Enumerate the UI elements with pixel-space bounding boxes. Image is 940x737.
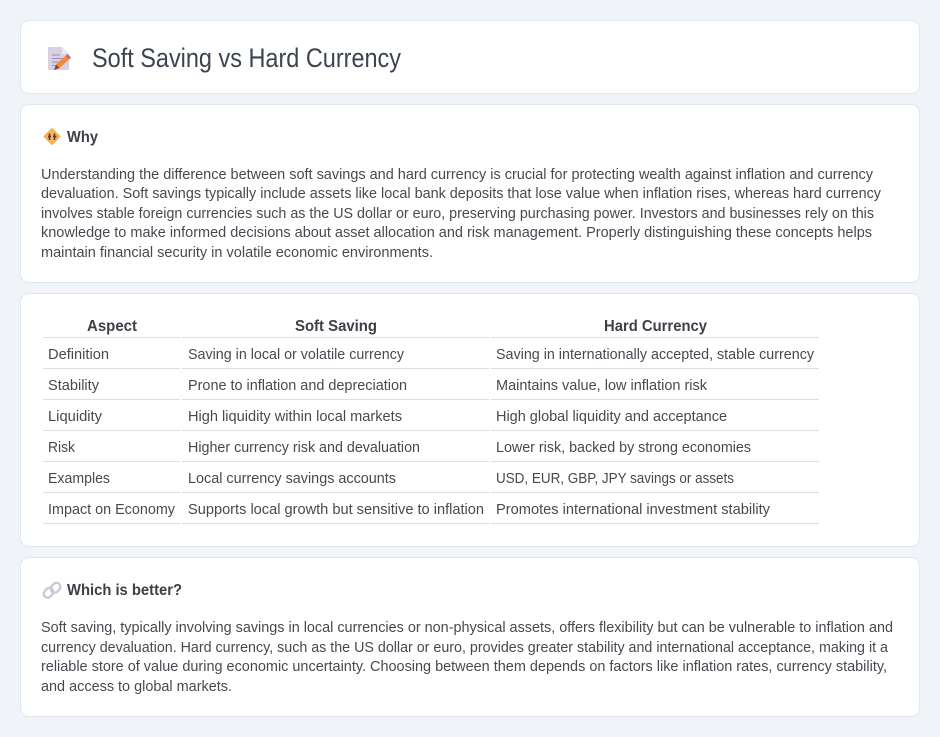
text block: why paragraph: Understanding the difference between soft savings and hard currency is crucial for protecting wealth against inflation and currency xyxy=(41,167,874,183)
table row: risk: Lower risk, backed by strong economies xyxy=(496,440,751,456)
table row: impact on economy: Supports local growth but sensitive to inflation xyxy=(188,502,484,518)
text block: why paragraph: maintain financial security in volatile economic environments. xyxy=(41,245,433,261)
table row: examples: Local currency savings accounts xyxy=(188,471,396,487)
table row: stability xyxy=(48,378,708,394)
table row: stability: Stability xyxy=(48,378,100,394)
table row: examples: USD, EUR, GBP, JPY savings or assets xyxy=(496,471,734,487)
text block: which is better paragraph: Soft saving, typically involving savings in local currencies or non-physical assets, offers flexibility but can be vulnerable to inflation and xyxy=(41,620,893,636)
panel: header xyxy=(20,20,920,94)
table row: impact on economy xyxy=(48,502,771,518)
table row: definition xyxy=(48,347,815,363)
table row: liquidity: High liquidity within local markets xyxy=(188,409,402,425)
table row: examples: Examples xyxy=(48,471,110,487)
table row: risk: Risk xyxy=(48,440,76,456)
panel: comparison table xyxy=(20,294,920,546)
heading: why: Why xyxy=(67,129,98,146)
table row: impact on economy: Promotes international investment stability xyxy=(496,502,771,518)
table row: examples xyxy=(48,471,734,487)
table row: stability: Prone to inflation and depreciation xyxy=(188,378,407,394)
table row: liquidity: Liquidity xyxy=(48,409,103,425)
text block: which is better paragraph xyxy=(41,620,893,695)
text block: why paragraph: knowledge to make informed decisions about asset allocation and risk management. Properly distinguishing these concepts helps xyxy=(41,225,872,241)
icon: link xyxy=(42,581,62,599)
table row: definition: Definition xyxy=(48,347,109,363)
icon: diamond sign xyxy=(44,128,60,144)
panel: why xyxy=(20,104,920,282)
table row: stability: Maintains value, low inflation risk xyxy=(496,378,708,394)
table header row: Aspect xyxy=(87,318,137,335)
table row: liquidity xyxy=(48,409,727,425)
text block: which is better paragraph: reliable store of value during economic uncertainty. Choosing between them depends on factors like inflation rates, currency stability, xyxy=(41,659,887,675)
text block: why paragraph: involves stable foreign currencies such as the US dollar or euro, preserving purchasing power. Investors and businesses rely on this xyxy=(41,206,874,222)
icon: memo document with pencil xyxy=(48,47,71,70)
panel: which is better xyxy=(20,558,920,716)
heading: which is better: Which is better? xyxy=(67,582,182,599)
table row: liquidity: High global liquidity and acceptance xyxy=(496,409,727,425)
table row: risk: Higher currency risk and devaluation xyxy=(188,440,420,456)
table row: impact on economy: Impact on Economy xyxy=(48,502,176,518)
text block: which is better paragraph: currency devaluation. Hard currency, such as the US dollar or euro, provides greater stability and international acceptance, making it a xyxy=(41,640,889,656)
text block: which is better paragraph: and access to global markets. xyxy=(41,679,232,695)
table row: risk xyxy=(48,440,751,456)
table header row xyxy=(87,318,707,335)
table row: definition: Saving in local or volatile currency xyxy=(188,347,405,363)
table row: definition: Saving in internationally accepted, stable currency xyxy=(496,347,815,363)
title: Soft Saving vs Hard Currency xyxy=(92,43,402,73)
text block: why paragraph xyxy=(41,167,882,261)
table header row: Soft Saving xyxy=(295,318,377,335)
text block: why paragraph: devaluation. Soft savings typically include assets like local bank deposits that lose value when inflation rises, whereas hard currency xyxy=(41,186,882,202)
table header row: Hard Currency xyxy=(604,318,707,335)
